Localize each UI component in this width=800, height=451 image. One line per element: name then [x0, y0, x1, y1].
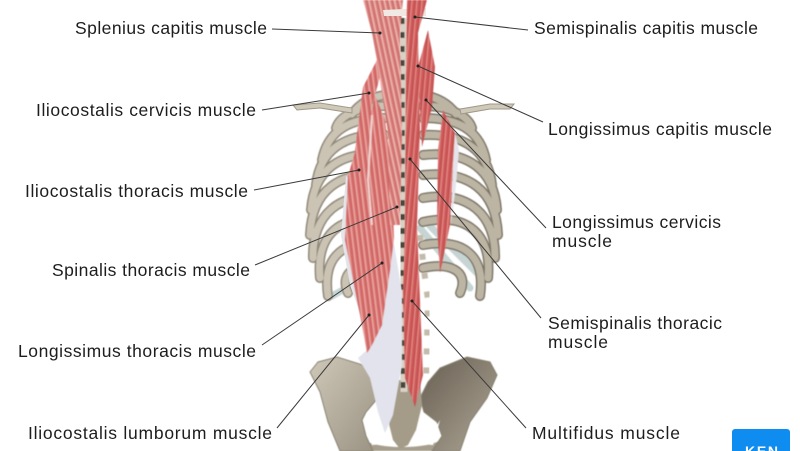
right hip bone [420, 357, 497, 451]
line: spinalis thoracis [255, 207, 397, 265]
line: longissimus cervicis [426, 100, 546, 228]
iliocostalis cervicis [355, 58, 380, 172]
iliocostalis and longissimus mass [345, 95, 394, 353]
splenius capitis [363, 0, 403, 225]
label: splenius capitis: Splenius capitis muscle [75, 18, 267, 38]
pelvis [310, 357, 497, 451]
label: semispinalis thoracic: Semispinalis thoracic [548, 313, 722, 333]
logo badge [732, 429, 790, 451]
label: longissimus cervicis: Longissimus cervicis [552, 212, 721, 232]
label: semispinalis capitis: Semispinalis capitis muscle [534, 18, 758, 38]
pale gaps between bundles [368, 115, 372, 225]
sacrum [388, 380, 422, 449]
line: semispinalis thoracic [410, 159, 541, 318]
white edge of left back muscles [341, 176, 362, 318]
line: iliocostalis thoracis [254, 170, 359, 190]
label: semispinalis thoracic: muscle [548, 332, 608, 352]
white tendon edge [451, 133, 459, 225]
label: iliocostalis cervicis: Iliocostalis cervicis muscle [36, 100, 256, 120]
semispinalis and multifidus [403, 0, 427, 407]
arch openings [364, 420, 440, 445]
top tendon band [383, 8, 426, 16]
line: longissimus thoracis [262, 263, 382, 345]
label: iliocostalis lumborum: Iliocostalis lumborum muscle [28, 423, 272, 443]
left hip bone [310, 357, 378, 451]
label: iliocostalis thoracis: Iliocostalis thoracis muscle [25, 181, 248, 201]
rib cage [310, 95, 498, 296]
line: iliocostalis lumborum [277, 315, 369, 428]
line: splenius capitis [272, 29, 380, 33]
label: longissimus capitis: Longissimus capitis muscle [548, 119, 772, 139]
label: multifidus: Multifidus muscle [532, 423, 680, 443]
label: spinalis thoracis: Spinalis thoracis muscle [52, 260, 250, 280]
vertebral column [402, 18, 428, 392]
aponeurosis [358, 238, 402, 433]
label: longissimus cervicis: muscle [552, 231, 612, 251]
line: longissimus capitis [418, 66, 543, 122]
longissimus thoracis strip [437, 110, 455, 273]
leader end dots [358, 16, 428, 316]
label: longissimus thoracis: Longissimus thoracis muscle [18, 341, 256, 361]
right muscles [403, 0, 459, 407]
shoulder blade bones [293, 103, 514, 114]
leader lines [254, 17, 546, 428]
longissimus capitis [418, 30, 435, 147]
line: semispinalis capitis [415, 17, 528, 30]
intercostal tissue [332, 226, 482, 296]
left muscles [345, 0, 403, 353]
pubic arch [352, 432, 452, 451]
line: iliocostalis cervicis [262, 93, 369, 110]
line: multifidus [412, 301, 526, 428]
